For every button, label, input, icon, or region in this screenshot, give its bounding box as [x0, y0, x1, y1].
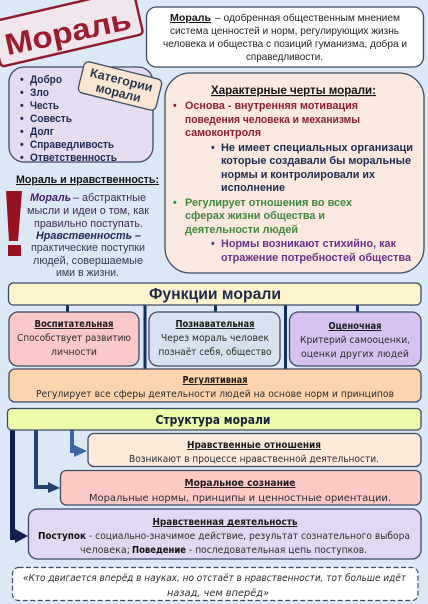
panel: moral consciousness — [60, 470, 421, 505]
panel: moral activity: Нравственная деятельность — [152, 517, 298, 528]
feature: no special organisations: нормы и контролировали их — [221, 169, 375, 181]
panel: evaluative function: Оценочная — [328, 321, 382, 332]
feature: no special organisations: исполнение — [221, 182, 285, 194]
panel: educational function: личности — [51, 347, 97, 358]
text block: morality vs ethics: – абстрактные — [73, 192, 146, 204]
feature: no special organisations: Не имеет специальных организаци — [221, 142, 413, 154]
panel: moral activity — [28, 509, 421, 559]
arrow: to moral activity — [10, 430, 28, 543]
panel: cognitive function: Через мораль человек — [161, 333, 269, 344]
text block: morality vs ethics: мысли и идеи о том, как — [27, 205, 149, 217]
panel: educational function: Воспитательная — [34, 319, 114, 330]
list of categories: Добро — [30, 74, 62, 86]
panel: cognitive function: познаёт себя, общество — [158, 347, 272, 358]
panel: definition of morality — [146, 7, 424, 67]
list of categories: Честь — [30, 100, 59, 112]
feature: regulates relations: • — [173, 197, 177, 209]
list of categories: • — [20, 139, 24, 151]
quote: «Кто двигается вперёд в науках, но отстаёт в нравственности, тот больше идёт — [23, 572, 406, 584]
panel: definition of morality: система ценностей и норм, регулирующих жизнь — [170, 26, 399, 37]
feature: regulates relations: Регулирует отношения во всех — [185, 197, 352, 209]
feature: internal motivation — [173, 100, 360, 139]
feature: norms arise spontaneously: • — [211, 238, 215, 250]
icon: exclamation mark — [6, 191, 22, 256]
panel: moral activity: человека; — [80, 545, 130, 556]
panel: moral activity: - социально-значимое действие, результат сознательного выбора — [89, 531, 410, 542]
feature: regulates relations: деятельности людей — [185, 224, 298, 236]
panel: definition of morality: человека и общества с позиций гуманизма, добра и — [163, 38, 407, 50]
text block: morality vs ethics: Мораль — [30, 192, 71, 204]
list of categories: • — [20, 87, 24, 99]
label: categories of morality — [77, 61, 163, 111]
title stamp: Мораль: Мораль — [2, 3, 134, 62]
panel: definition of morality: справедливости. — [246, 52, 323, 63]
panel: cognitive function — [149, 312, 280, 366]
label: categories of morality: морали — [94, 80, 142, 105]
heading bar: structure of morality: Структура морали — [156, 413, 270, 427]
panel: cognitive function: Познавательная — [176, 319, 254, 330]
text block: morality vs ethics: Нравственность – — [36, 230, 141, 242]
panel: evaluative function — [290, 312, 421, 366]
connectors: functions tree — [66, 305, 359, 369]
feature: norms arise spontaneously — [211, 238, 411, 264]
list of categories: Ответственность — [30, 152, 117, 164]
quote: назад, чем вперёд» — [167, 588, 269, 599]
feature: regulates relations — [173, 197, 352, 236]
feature: norms arise spontaneously: отражение потребностей общества — [221, 252, 411, 264]
text block: morality vs ethics: правильно поступать. — [34, 218, 143, 230]
panel: definition of morality: – одобренная общественным мнением — [215, 12, 400, 24]
panel: definition of morality: Мораль — [170, 12, 212, 24]
list of categories: Совесть — [30, 113, 72, 125]
panel: moral activity: Поступок — [38, 531, 86, 542]
feature: internal motivation: Основа - внутренняя мотивация — [185, 100, 358, 112]
arrow: to moral consciousness — [34, 430, 60, 493]
panel: regulatory function: Регулятивная — [182, 375, 248, 386]
feature: internal motivation: поведения человека и механизмы — [185, 114, 360, 126]
panel: characteristic features of morality — [165, 73, 424, 273]
list of categories: Зло — [30, 87, 50, 99]
text block: morality vs ethics — [27, 192, 149, 279]
panel: moral activity: - последовательная цепь поступков. — [189, 545, 367, 556]
heading bar: functions of morality: Функции морали — [149, 286, 281, 303]
list of categories: Справедливость — [30, 139, 114, 151]
panel: educational function: Способствует развитию — [17, 333, 131, 344]
panel: evaluative function: оценки других людей — [301, 349, 409, 360]
list of categories: • — [20, 100, 24, 112]
panel: moral relations: Нравственные отношения — [187, 440, 321, 451]
feature: internal motivation: самоконтроля — [185, 127, 261, 139]
list of categories: • — [20, 126, 24, 138]
heading bar: structure of morality — [8, 408, 421, 430]
panel: moral consciousness: Моральное сознание — [184, 478, 296, 489]
panel: moral relations — [88, 434, 421, 466]
heading: morality and ethics: Мораль и нравственность: — [16, 174, 159, 186]
list of categories: Долг — [30, 126, 55, 138]
text block: morality vs ethics: людей, совершаемые — [33, 255, 143, 267]
feature: no special organisations — [211, 142, 413, 194]
panel: educational function — [9, 312, 139, 366]
panel: regulatory function: Регулирует все сферы деятельности людей на основе норм и принципов — [36, 389, 394, 400]
panel: moral relations: Возникают в процессе нравственной деятельности. — [129, 454, 379, 465]
quote — [12, 568, 418, 600]
feature: no special organisations: • — [211, 142, 215, 154]
feature: norms arise spontaneously: Нормы возникают стихийно, как — [221, 238, 397, 250]
list of categories — [20, 74, 117, 164]
feature: internal motivation: • — [173, 100, 177, 112]
panel: moral consciousness: Моральные нормы, принципы и ценностные ориентации. — [89, 493, 391, 504]
arrow: to moral relations — [70, 430, 87, 457]
list of categories: • — [20, 113, 24, 125]
feature: regulates relations: сферах жизни общества и — [185, 210, 325, 222]
list of categories: • — [20, 152, 24, 164]
list of categories: • — [20, 74, 24, 86]
text block: morality vs ethics: ими в жизни. — [56, 267, 119, 279]
feature: no special organisations: которые создавали бы моральные — [221, 155, 411, 167]
heading: characteristic features: Характерные черты морали: — [211, 85, 376, 97]
panel: moral activity: Поведение — [132, 545, 186, 556]
text block: morality vs ethics: практические поступки — [31, 242, 145, 254]
panel: evaluative function: Критерий самооценки, — [300, 335, 410, 346]
heading bar: functions of morality — [8, 283, 421, 305]
panel: categories of morality — [9, 67, 153, 164]
panel: regulatory function — [9, 369, 421, 402]
label: categories of morality: Категории — [89, 66, 154, 95]
